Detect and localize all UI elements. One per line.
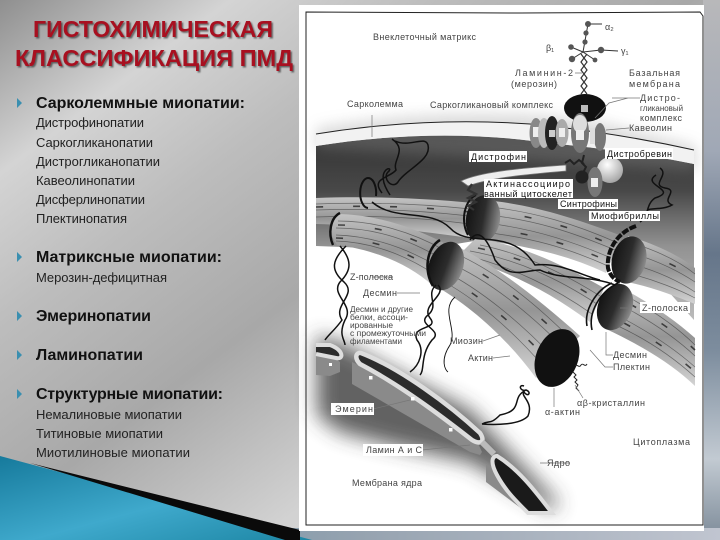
diagram labels: Ламин А и С <box>366 445 422 455</box>
list: sarcolemmal myopathies: Саркогликанопатии <box>36 135 153 150</box>
list: matrix myopathies: Матриксные миопатии: <box>36 249 222 266</box>
nuclear envelope lower fragment <box>482 442 552 515</box>
diagram labels: Миофибриллы <box>591 211 659 221</box>
list: matrix myopathies <box>17 249 222 285</box>
nucleus shadow <box>317 335 560 510</box>
nuclear envelope central fragment <box>352 353 482 455</box>
actin-associated cytoskeleton coil <box>468 184 476 210</box>
list: sarcolemmal myopathies: Сарколеммные миопатии: <box>36 95 245 112</box>
diagram labels: Внеклеточный матрикс <box>373 32 476 42</box>
list: structural myopathies: Миотилиновые миопатии <box>36 445 190 460</box>
title: КЛАССИФИКАЦИЯ ПМД <box>16 46 294 72</box>
diagram labels: Дистрофин <box>471 152 526 162</box>
diagram labels: ванный цитоскелет <box>484 189 572 199</box>
diagram labels: Актинассоциирo <box>486 179 570 189</box>
diagram labels: с промежуточными <box>350 329 426 338</box>
diagram labels: комплекс <box>640 113 682 123</box>
diagram labels: Кавеолин <box>629 123 672 133</box>
teal corner wedge <box>0 456 312 540</box>
diagram labels: Дистро- <box>640 93 680 103</box>
filaments: desmin wavy lines <box>325 139 672 424</box>
diagram labels: Саркогликановый комплекс <box>430 100 554 110</box>
diagram labels: Ядро <box>547 458 570 468</box>
diagram labels: Десмин и другие <box>350 305 414 314</box>
cylinder: upper right myofibril <box>606 226 695 304</box>
list: sarcolemmal myopathies: Дисферлинопатии <box>36 192 145 207</box>
title: ГИСТОХИМИЧЕСКАЯ <box>33 16 273 42</box>
list: sarcolemmal myopathies: Дистрогликанопатии <box>36 154 160 169</box>
diagram labels: Z-полоска <box>642 303 688 313</box>
diagram labels: Ламинин-2 <box>515 68 573 78</box>
panel: muscle fibre diagram <box>299 5 704 531</box>
list: sarcolemmal myopathies <box>17 95 245 226</box>
title: ГИСТОХИМИЧЕСКАЯ <box>34 18 274 44</box>
cylinder: lower middle myofibril <box>458 238 604 322</box>
nuclear envelope left fragment <box>316 343 341 376</box>
dystrobrevin and syntrophins <box>565 155 623 197</box>
diagram labels: Цитоплазма <box>633 437 690 447</box>
list: structural myopathies: Немалиновые миопатии <box>36 407 182 422</box>
diagram labels: Актин <box>468 353 493 363</box>
diagram labels: (мерозин) <box>511 79 557 89</box>
laminin-2 molecule <box>568 21 618 94</box>
black fibre cross-section <box>526 322 588 394</box>
diagram labels: Синтрофины <box>560 199 617 209</box>
diagram labels: белки, ассоци- <box>350 313 408 322</box>
cylinder: upper middle myofibril <box>462 192 622 273</box>
diagram labels <box>331 22 690 488</box>
cylinder: lower right myofibril <box>587 278 695 386</box>
diagram labels: Дистробревин <box>607 149 672 159</box>
list: structural myopathies: Титиновые миопатии <box>36 426 163 441</box>
dystroglycan complex <box>564 94 606 153</box>
list: sarcolemmal myopathies: Кавеолинопатии <box>36 173 135 188</box>
diagram labels: Сарколемма <box>347 99 403 109</box>
diagram labels: Плектин <box>613 362 650 372</box>
list: sarcolemmal myopathies: Плектинопатия <box>36 211 127 226</box>
cylinder: front central myofibril <box>421 237 580 378</box>
diagram labels: β₁ <box>546 43 554 53</box>
list: sarcolemmal myopathies: Дистрофинопатии <box>36 115 144 130</box>
sarcolemma line <box>316 122 694 150</box>
cylinder: front left myofibril <box>330 213 448 285</box>
diagram labels: Эмерин <box>335 404 373 414</box>
diagram labels: Десмин <box>613 350 647 360</box>
list: structural myopathies: Структурные миопатии: <box>36 386 223 403</box>
diagram labels: Миозин <box>450 336 483 346</box>
cylinder: back left myofibril <box>316 178 492 240</box>
right background strip <box>703 0 720 540</box>
sarcoplasm shaded zone <box>316 113 696 320</box>
diagram labels: мембрана <box>629 79 680 89</box>
list: emerinopathies: Эмеринопатии <box>36 308 151 325</box>
title: КЛАССИФИКАЦИЯ ПМД <box>15 45 293 71</box>
diagram labels: αβ-кристаллин <box>577 398 645 408</box>
diagram labels: Мембрана ядра <box>352 478 422 488</box>
bottom background strip <box>0 528 720 540</box>
diagram labels: α-актин <box>545 407 580 417</box>
sarcoglycan complex <box>530 116 606 151</box>
list: structural myopathies <box>17 386 223 460</box>
list: laminopathies: Ламинопатии <box>36 347 143 364</box>
diagram labels: Базальная <box>629 68 680 78</box>
title <box>15 16 294 72</box>
diagram labels: филаментами <box>350 337 402 346</box>
dystrophin ribbon <box>461 165 566 186</box>
diagram labels: Z-полоска <box>350 272 393 282</box>
diagram labels: ированные <box>350 321 394 330</box>
diagram labels: γ₁ <box>621 46 629 56</box>
list: matrix myopathies: Мерозин-дефицитная <box>36 270 167 285</box>
diagram labels: α₂ <box>605 22 614 32</box>
crystallin and plectin leaders <box>573 364 587 391</box>
diagram labels: Десмин <box>363 288 397 298</box>
diagram labels: гликановый <box>640 104 683 113</box>
